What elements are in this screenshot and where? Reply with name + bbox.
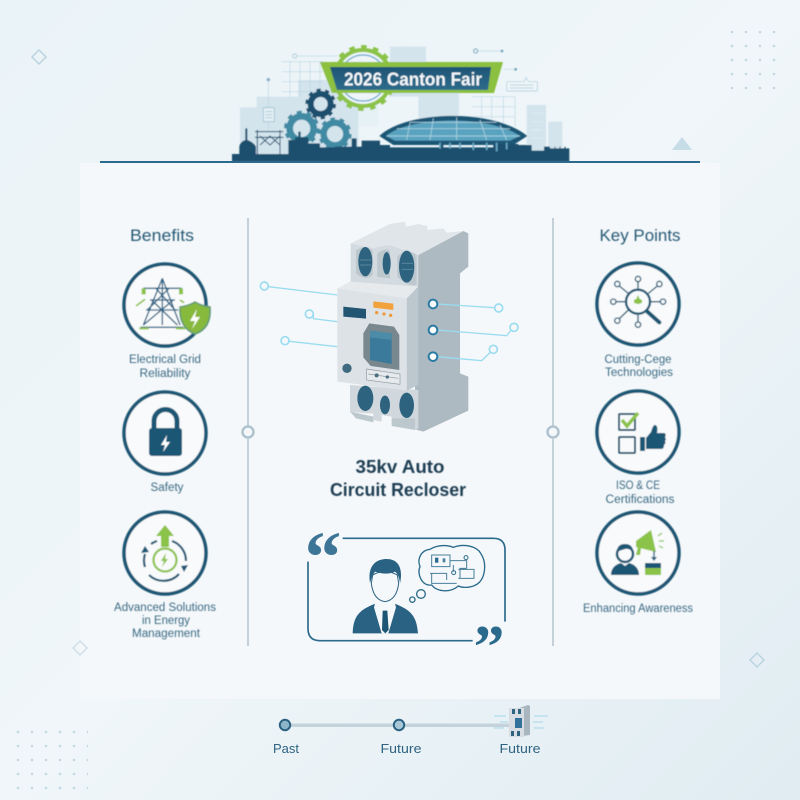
header rule — [100, 161, 700, 163]
label: Future: Future — [380, 742, 422, 756]
label: Electrical Grid Reliability: Electrical Grid — [129, 354, 201, 366]
label: Advanced Solutions in Energy Management: Advanced Solutions — [114, 602, 216, 614]
label: Future: Future — [500, 742, 541, 756]
label: Cutting-Cege Technologies: Technologies — [605, 367, 673, 379]
panel: quote box with engineer: ” — [474, 613, 504, 681]
label: Cutting-Cege Technologies: Cutting-Cege — [604, 354, 672, 366]
title: product name: 35kv Auto — [356, 457, 445, 477]
label: ISO & CE Certifications — [606, 480, 675, 506]
title: product name — [330, 457, 466, 500]
label: Advanced Solutions in Energy Management — [114, 602, 216, 640]
benefit: advanced solutions — [124, 512, 206, 594]
label: Advanced Solutions in Energy Management: in Energy — [142, 615, 190, 627]
label: Electrical Grid Reliability: Reliability — [140, 368, 191, 380]
timeline — [273, 705, 548, 756]
panel: main white card — [80, 163, 720, 699]
device body — [337, 222, 468, 432]
right callout wires — [437, 304, 518, 361]
panel: key points column — [583, 226, 693, 615]
header: skyline and title banner — [232, 47, 569, 162]
icon: gears — [285, 90, 350, 149]
label: Safety: Safety — [150, 482, 184, 494]
quote frame — [308, 538, 505, 641]
heading: Benefits: Benefits — [130, 226, 194, 245]
skyline illustration — [232, 47, 569, 162]
label: Enhancing Awareness: Enhancing Awareness — [583, 603, 693, 615]
heading: Key Points: Key Points — [600, 226, 680, 245]
point: enhancing awareness — [597, 512, 679, 594]
node: past — [280, 720, 290, 730]
node: future — [394, 720, 404, 730]
dividers — [248, 218, 553, 646]
illustration: circuit recloser device — [260, 222, 518, 432]
icon: small device — [494, 705, 548, 737]
title: product name: Circuit Recloser — [330, 480, 466, 500]
panel: quote box with engineer — [305, 516, 505, 681]
label: ISO & CE Certifications: Certifications — [606, 494, 675, 506]
panel: benefits column — [114, 226, 216, 640]
benefit: electrical grid reliability — [124, 264, 210, 346]
title banner — [320, 62, 503, 93]
skyline silhouette — [232, 128, 569, 162]
benefit: safety — [124, 392, 206, 474]
callout nodes — [429, 300, 437, 361]
icon: engineer — [353, 559, 418, 633]
icon: green gear badge — [332, 47, 394, 109]
label: Electrical Grid Reliability — [129, 354, 201, 380]
quote marks: “ — [305, 516, 341, 597]
thought bubble with circuit — [410, 545, 485, 602]
left callout wires — [260, 282, 337, 347]
label: Cutting-Cege Technologies — [604, 354, 673, 379]
point: ISO and CE certifications — [597, 391, 679, 473]
title banner: 2026 Canton Fair — [344, 70, 482, 90]
label: Advanced Solutions in Energy Management: Management — [132, 628, 201, 640]
point: cutting-edge technologies — [597, 263, 679, 345]
label: ISO & CE Certifications: ISO & CE — [616, 480, 660, 492]
dome building — [379, 116, 527, 145]
label: Past: Past — [273, 742, 300, 756]
